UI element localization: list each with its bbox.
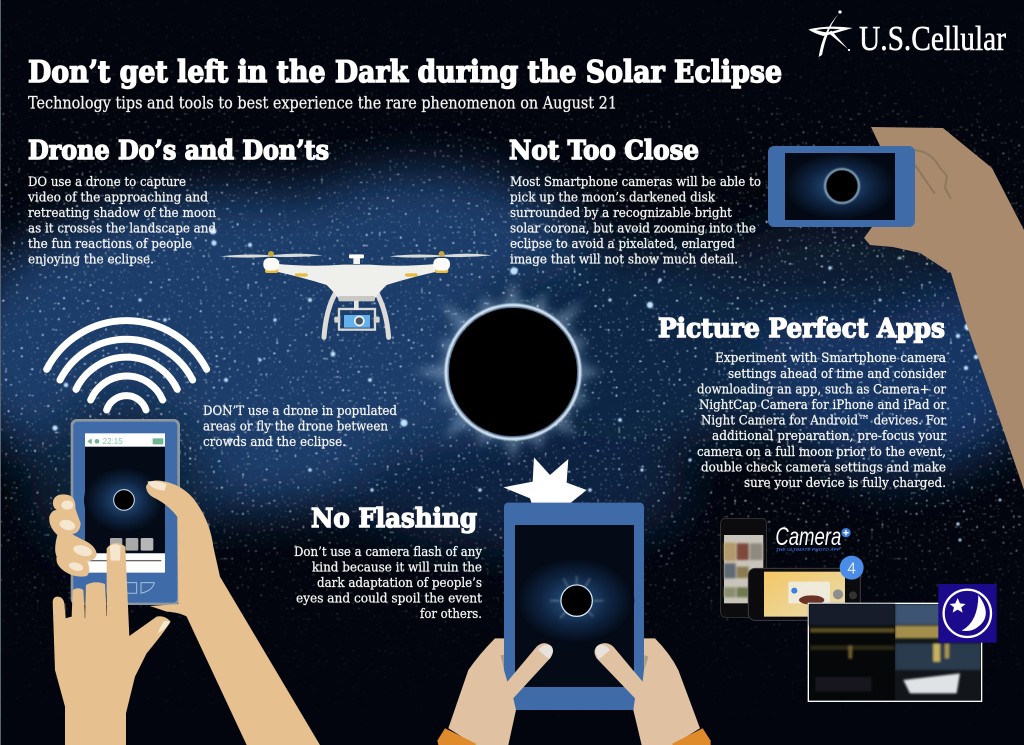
text block: picture perfect apps: Experiment with Smartphone camera (715, 351, 946, 366)
text block: picture perfect apps: camera on a full moon prior to the event, (697, 445, 946, 460)
Camera+ logo: THE ULTIMATE PHOTO APP (776, 547, 841, 553)
illustration: hand holding phone, top right (768, 127, 1024, 490)
text block: picture perfect apps: double check camera settings and make (701, 460, 946, 476)
title: Don’t get left in the Dark during the Solar Eclipse (28, 55, 782, 90)
tablet body (504, 503, 644, 710)
text block: no flashing (294, 545, 483, 622)
text block: drone don't: crowds and the eclipse. (203, 435, 346, 450)
brown hand (864, 127, 1024, 490)
illustration: hands holding tablet with flash (437, 457, 711, 745)
logo: U.S. Cellular (808, 10, 1006, 58)
text block: drone don't: DON’T use a drone in populated (203, 404, 397, 419)
camera gimbal (334, 301, 380, 330)
text block: picture perfect apps: Night Camera for Android™ devices. For (701, 414, 947, 428)
text block: picture perfect apps: NightCap Camera for iPhone and iPad or (699, 398, 947, 413)
heading: Picture Perfect Apps: Picture Perfect Apps (658, 314, 945, 344)
subtitle: Technology tips and tools to best experience the rare phenomenon on August 21 (28, 94, 617, 112)
text block: drone do: enjoying the eclipse. (28, 252, 154, 268)
pointing hand (53, 543, 171, 745)
orange cuffs (437, 728, 477, 745)
left hand fingers gripping (49, 494, 97, 577)
text block: no flashing: for others. (420, 607, 482, 622)
text block: drone do: video of the approaching and (27, 190, 208, 206)
phone screen: 22:15 (103, 437, 123, 446)
right hand (595, 638, 700, 745)
text block: not too close: image that will not show much detail. (510, 252, 738, 268)
text block: not too close: pick up the moon’s darkened disk (510, 190, 716, 206)
left hand (448, 638, 553, 745)
heading: Drone Do's and Don'ts: Drone Do’s and Don’ts (28, 136, 329, 166)
text block: drone do: retreating shadow of the moon (28, 206, 216, 221)
icon: flash star (503, 457, 587, 503)
NightCap app icon (938, 584, 997, 643)
drone legs (324, 294, 389, 337)
corona glow rays (413, 280, 603, 462)
text block: no flashing: dark adaptation of people’s (317, 576, 482, 591)
text block: not too close: solar corona, but avoid zooming into the (510, 222, 756, 236)
text block: not too close: eclipse to avoid a pixelated, enlarged (510, 237, 735, 252)
text block: not too close: surrounded by a recognizable bright (510, 206, 733, 221)
text block: picture perfect apps (697, 351, 947, 491)
text block: no flashing: Don’t use a camera flash of any (294, 545, 482, 560)
NightCap before and after photo (808, 603, 982, 701)
version 4 badge (840, 556, 864, 580)
phone screen with eclipse (785, 153, 895, 220)
version 4 badge: 4 (847, 560, 856, 577)
illustration: hands using smartphone (49, 419, 320, 745)
icon: logo star (808, 10, 853, 57)
main eclipse with corona (413, 280, 603, 462)
text block: picture perfect apps: sure your device is fully charged. (744, 476, 946, 491)
heading: Not Too Close: Not Too Close (509, 136, 699, 166)
text block: drone don't: areas or fly the drone between (203, 420, 388, 434)
text block: drone do: DO use a drone to capture (28, 175, 186, 190)
text block: drone do: the fun reactions of people (28, 237, 192, 252)
drone (221, 251, 492, 337)
Camera+ landscape phone (748, 568, 860, 620)
text block: not too close (510, 175, 761, 268)
text block: picture perfect apps: downloading an app, such as Camera+ or (697, 382, 947, 398)
right hand with thumb (146, 480, 320, 745)
phone body (71, 419, 180, 605)
text block: picture perfect apps: settings ahead of time and consider (728, 367, 947, 382)
text block: drone don't (203, 404, 397, 450)
tablet screen with eclipse (515, 525, 634, 687)
drone body (272, 263, 442, 298)
text block: drone do: as it crosses the landscape and (28, 222, 217, 236)
icon: wifi signal (47, 321, 207, 410)
phone body (768, 146, 915, 227)
text block: no flashing: kind because it will ruin the (312, 560, 482, 576)
Camera+ portrait phone (721, 518, 766, 617)
text block: picture perfect apps: additional preparation, pre-focus your (712, 429, 947, 444)
phone screen (84, 433, 165, 593)
propellers (221, 251, 492, 258)
text block: drone do (27, 175, 217, 268)
app screenshots (721, 518, 997, 701)
text block: no flashing: eyes and could spoil the event (296, 592, 483, 606)
text block: not too close: Most Smartphone cameras will be able to (510, 175, 761, 190)
heading: No Flashing: No Flashing (311, 504, 477, 534)
Camera+ logo: Camera (775, 524, 841, 551)
